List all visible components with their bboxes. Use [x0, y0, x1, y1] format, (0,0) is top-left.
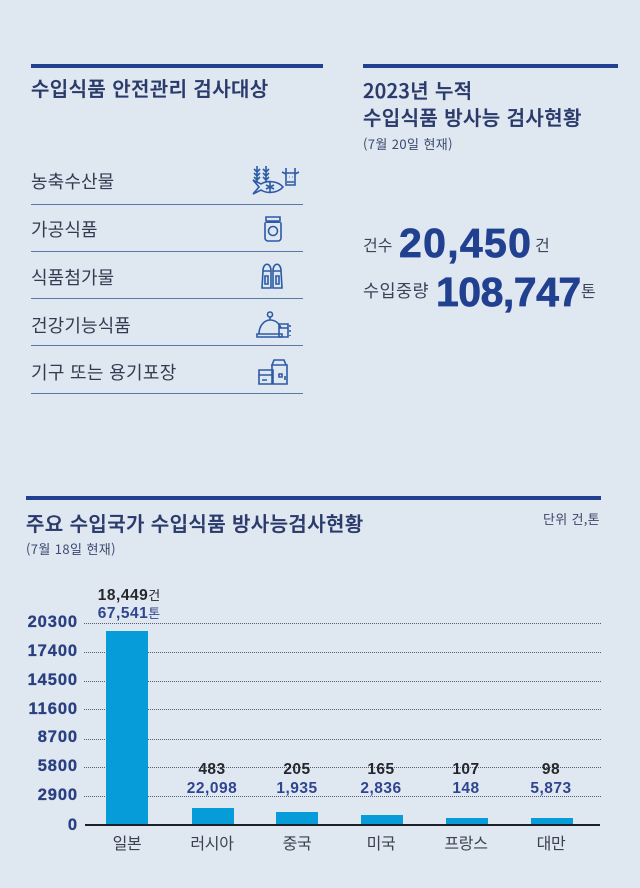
bar: USA: [361, 815, 403, 825]
bar: Japan: [106, 631, 148, 825]
values: USA: 2,836: [360, 780, 402, 797]
heading: cumulative status: [363, 75, 582, 131]
heading: cumulative status: 2023년 누적: [363, 75, 473, 104]
y axis labels: 11600: [29, 700, 78, 718]
values: USA: 165: [367, 761, 395, 778]
stat: case count: 건: [535, 232, 550, 256]
category: Japan: 일본: [113, 830, 141, 854]
category: Russia: 러시아: [190, 830, 234, 854]
list row: containers and packaging: [31, 345, 303, 394]
values: Taiwan: 98: [542, 761, 560, 778]
values: Japan: 18,449건: [98, 585, 160, 604]
heading: chart: 주요 수입국가 수입식품 방사능검사현황: [26, 508, 364, 537]
values: Taiwan: [530, 761, 572, 797]
stat: case count: 건수: [363, 232, 392, 256]
values: China: 1,935: [276, 780, 318, 797]
y axis labels: 17400: [28, 642, 78, 660]
y axis labels: 5800: [38, 757, 78, 775]
category: Taiwan: 대만: [537, 830, 565, 854]
values: Russia: 22,098: [187, 780, 237, 797]
stat: case count: 20,450: [399, 220, 532, 266]
date note: chart: (7월 18일 현재): [26, 539, 116, 558]
values: Japan: [98, 585, 160, 622]
date note: (7월 20일 현재): [363, 134, 453, 153]
list row: processed food: 가공식품: [31, 216, 98, 242]
category: France: 프랑스: [444, 830, 488, 854]
values: China: 205: [283, 761, 311, 778]
list row: health food: 건강기능식품: [31, 312, 131, 338]
y axis labels: 20300: [28, 613, 78, 631]
stat: import weight: [363, 269, 596, 315]
bar: Taiwan: [531, 818, 573, 825]
bar: China: [276, 812, 318, 825]
values: Japan: 67,541톤: [98, 603, 160, 622]
stat: import weight: 톤: [581, 278, 596, 302]
list row: food additives: [31, 251, 303, 299]
values: France: 148: [452, 780, 480, 797]
list row: containers and packaging: 기구 또는 용기포장: [31, 359, 177, 385]
category: China: 중국: [283, 830, 311, 854]
list row: agricultural products: [31, 157, 303, 205]
unit note: 단위 건,톤: [543, 509, 600, 528]
values: Russia: [187, 761, 237, 797]
heading: cumulative status: 수입식품 방사능 검사현황: [363, 102, 582, 131]
rule: chart section: [26, 496, 601, 500]
values: USA: [360, 761, 402, 797]
values: Russia: 483: [198, 761, 226, 778]
list row: health food: [31, 298, 303, 346]
values: Taiwan: 5,873: [530, 780, 572, 797]
y axis labels: 0: [68, 816, 78, 834]
heading: inspection targets: 수입식품 안전관리 검사대상: [31, 73, 269, 102]
panel: cumulative status: [363, 75, 596, 315]
y axis labels: 8700: [38, 728, 78, 746]
y axis labels: 14500: [28, 671, 78, 689]
list row: agricultural products: 농축수산물: [31, 168, 114, 194]
stat: import weight: 수입중량: [363, 278, 429, 303]
values: China: [276, 761, 318, 797]
bar: France: [446, 818, 488, 825]
category: USA: 미국: [367, 830, 395, 854]
list row: processed food: [31, 204, 303, 252]
x axis: [85, 824, 600, 826]
values: France: [452, 761, 480, 797]
values: France: 107: [452, 761, 480, 778]
list row: food additives: 식품첨가물: [31, 264, 114, 290]
stat: import weight: 108,747: [436, 269, 581, 315]
y axis labels: [28, 613, 78, 834]
y axis labels: 2900: [38, 786, 78, 804]
bar: Russia: [192, 808, 234, 825]
